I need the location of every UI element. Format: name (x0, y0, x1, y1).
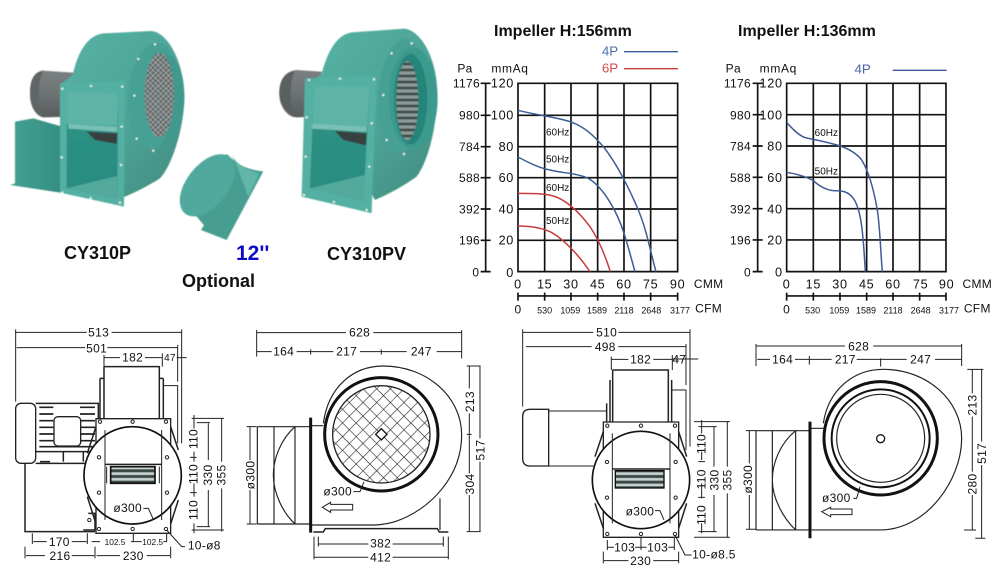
chart: impeller 136mm performance curves: 45 (859, 278, 874, 292)
drawing: CY310P side elevation: 382 (370, 537, 391, 551)
drawing: CY310PV front elevation: 182 (630, 352, 651, 366)
drawing: CY310P side elevation: ø300 (323, 485, 352, 499)
drawing: CY310PV front elevation: 230 (630, 554, 651, 568)
chart: impeller 156mm performance curves: 60Hz (546, 183, 569, 194)
drawing: CY310PV side elevation: ø300 (741, 465, 755, 494)
chart: impeller 156mm performance curves: 588 (459, 171, 480, 185)
chart: impeller 136mm performance curves: 4P (854, 62, 871, 77)
chart: impeller 136mm performance curves: 15 (806, 278, 821, 292)
chart: impeller 136mm performance curves: 1589 (856, 305, 876, 315)
chart: impeller 136mm performance curves: CFM (964, 302, 991, 316)
chart: impeller 156mm performance curves: 90 (670, 278, 685, 292)
drawing: CY310P front elevation: 216 (49, 549, 70, 563)
drawing: CY310P side elevation: 164 (273, 345, 294, 359)
drawing: CY310PV front elevation: 110 (695, 469, 709, 489)
chart: impeller 136mm performance curves: 3177 (939, 305, 959, 315)
chart: impeller 156mm performance curves: 60Hz (546, 127, 569, 138)
chart: impeller 136mm performance curves: 60Hz (815, 128, 838, 139)
chart: impeller 136mm performance curves: Pa (726, 61, 741, 75)
drawing: CY310P front elevation: 355 (214, 464, 228, 485)
chart: impeller 156mm performance curves: 0 (472, 266, 479, 280)
chart: impeller 156mm performance curves: 1059 (560, 305, 580, 315)
drawing: CY310P side elevation: 213 (463, 391, 477, 412)
chart: impeller 156mm performance curves: 15 (537, 278, 552, 292)
chart: impeller 156mm performance curves: 80 (499, 140, 514, 154)
chart: impeller 136mm performance curves: 20 (767, 234, 783, 248)
chart: impeller 156mm performance curves: 530 (537, 305, 552, 315)
chart: impeller 136mm performance curves (724, 61, 992, 317)
chart: impeller 136mm performance curves: 100 (760, 108, 783, 122)
chart: impeller 136mm performance curves: 2648 (911, 305, 931, 315)
chart: impeller 156mm performance curves (453, 44, 723, 317)
chart: impeller 156mm performance curves: 75 (643, 278, 658, 292)
drawing: CY310P side elevation: 412 (370, 551, 391, 565)
chart: impeller 136mm performance curves: 1059 (829, 305, 849, 315)
drawing: CY310P side elevation: ø300 (243, 461, 257, 489)
drawing: CY310PV front elevation: 110 (695, 434, 709, 454)
drawing: CY310P side elevation: 628 (349, 326, 370, 340)
chart: impeller 136mm performance curves: 0 (744, 266, 751, 280)
drawing: CY310P front elevation: 501 (86, 341, 107, 355)
drawing: CY310PV side elevation: 164 (772, 352, 793, 366)
drawing: CY310PV front elevation: 355 (721, 469, 735, 490)
drawing: CY310P front elevation: 170 (49, 535, 70, 549)
chart: impeller 156mm performance curves: 0 (506, 266, 514, 280)
chart: impeller 156mm performance curves: CMM (694, 277, 723, 291)
chart: impeller 156mm performance curves: 120 (491, 77, 514, 91)
chart: impeller 156mm performance curves: Pa (457, 61, 473, 75)
chart: impeller 156mm performance curves: 0 (514, 278, 522, 292)
drawing: CY310PV side elevation: ø300 (822, 491, 851, 505)
chart: impeller 136mm performance curves: 784 (730, 140, 751, 154)
chart: impeller 136mm performance curves: 30 (832, 278, 848, 292)
drawing: CY310P side elevation: 217 (336, 345, 357, 359)
photo: optional 12 inch duct adapter (169, 144, 263, 240)
chart: impeller 136mm performance curves: 0 (775, 266, 783, 280)
chart: impeller 136mm performance curves: 980 (730, 108, 751, 122)
chart: impeller 136mm performance curves: 0 (783, 303, 790, 317)
chart: impeller 156mm performance curves: 1176 (453, 77, 480, 91)
chart: impeller 136mm performance curves: 120 (760, 77, 783, 91)
drawing: CY310PV side elevation (741, 340, 989, 538)
drawing: CY310PV front elevation: 47 (672, 353, 686, 367)
drawing: CY310PV front elevation: 330 (707, 469, 721, 490)
chart: impeller 156mm performance curves: 2118 (614, 305, 634, 315)
chart: impeller 156mm performance curves: 0 (514, 303, 521, 317)
chart: impeller 136mm performance curves: CMM (962, 277, 992, 291)
drawing: CY310PV front elevation: 10-ø8.5 (692, 548, 736, 562)
drawing: CY310P front elevation: 102.5 (105, 537, 126, 547)
drawing: CY310PV side elevation: 628 (848, 340, 869, 354)
chart: impeller 136mm performance curves: 392 (730, 202, 751, 216)
chart: impeller 156mm performance curves: 6P (602, 61, 618, 76)
chart: impeller 156mm performance curves: 4P (602, 44, 618, 59)
photo: CY310PV blower (279, 29, 438, 213)
drawing: CY310PV side elevation: 213 (966, 394, 980, 415)
drawing: CY310PV front elevation: 498 (595, 340, 616, 354)
chart: impeller 156mm performance curves: 980 (459, 108, 480, 122)
label: CY310P: CY310P (64, 243, 131, 263)
drawing: CY310P front elevation: 110 (187, 429, 201, 449)
chart: impeller 136mm performance curves: 60 (767, 171, 783, 185)
chart: impeller 156mm performance curves: 30 (563, 278, 579, 292)
chart: impeller 156mm performance curves: 45 (590, 278, 605, 292)
label: 12 inch size: 12'' (236, 242, 269, 265)
chart: impeller 136mm performance curves: 1176 (724, 77, 751, 91)
chart: impeller 156mm performance curves: 100 (491, 108, 514, 122)
chart: impeller 136mm performance curves: 80 (767, 140, 783, 154)
chart: impeller 156mm performance curves: 40 (499, 202, 514, 216)
drawing: CY310PV side elevation: 517 (975, 443, 989, 464)
chart: impeller 136mm performance curves: 530 (805, 305, 820, 315)
drawing: CY310PV side elevation: 247 (910, 352, 931, 366)
chart: impeller 156mm performance curves: 20 (499, 234, 514, 248)
chart: impeller 156mm performance curves: CFM (695, 302, 722, 316)
heading: impeller 136mm: Impeller H:136mm (738, 23, 876, 40)
chart: impeller 136mm performance curves: 60 (885, 278, 901, 292)
drawing: CY310P side elevation: 304 (463, 473, 477, 494)
drawing: CY310P side elevation (243, 326, 487, 565)
drawing: CY310P front elevation: 110 (187, 464, 201, 484)
drawing: CY310P front elevation: 330 (201, 464, 215, 485)
drawing: CY310P front elevation: 182 (122, 351, 143, 365)
drawing: CY310PV side elevation: 280 (966, 473, 980, 494)
drawing: CY310P front elevation: 110 (187, 500, 201, 520)
chart: impeller 156mm performance curves: 196 (459, 234, 480, 248)
chart: impeller 156mm performance curves: 50Hz (546, 154, 569, 165)
chart: impeller 136mm performance curves: 40 (767, 202, 783, 216)
drawing: CY310PV front elevation: 510 (596, 326, 617, 340)
chart: impeller 156mm performance curves: 60 (499, 171, 514, 185)
drawing: CY310PV front elevation: ø300 (626, 505, 654, 519)
chart: impeller 136mm performance curves: 50Hz (815, 167, 838, 178)
chart: impeller 136mm performance curves: 2118 (883, 305, 903, 315)
chart: impeller 156mm performance curves: 2648 (641, 305, 661, 315)
drawing: CY310P side elevation: 517 (473, 439, 487, 460)
drawing: CY310PV side elevation: 217 (835, 352, 856, 366)
chart: impeller 136mm performance curves: 196 (730, 234, 751, 248)
label: CY310PV: CY310PV (327, 244, 406, 264)
drawing: CY310PV front elevation: 103 (647, 541, 668, 555)
chart: impeller 156mm performance curves: mmAq (491, 61, 529, 75)
drawing: CY310PV front elevation: 110 (695, 505, 709, 525)
chart: impeller 156mm performance curves: 1589 (587, 305, 607, 315)
label: Optional: Optional (182, 271, 255, 291)
chart: impeller 136mm performance curves: mmAq (760, 61, 797, 75)
chart: impeller 156mm performance curves: 3177 (670, 305, 690, 315)
chart: impeller 136mm performance curves: 90 (939, 278, 954, 292)
drawing: CY310P front elevation: 47 (164, 353, 176, 364)
chart: impeller 136mm performance curves: 0 (783, 278, 791, 292)
chart: impeller 156mm performance curves: 392 (459, 202, 480, 216)
drawing: CY310PV front elevation: 103 (614, 541, 635, 555)
chart: impeller 136mm performance curves: 588 (730, 171, 751, 185)
drawing: CY310P front elevation: 513 (88, 326, 109, 340)
chart: impeller 136mm performance curves: 75 (913, 278, 928, 292)
drawing: CY310P front elevation: 10-ø8 (188, 538, 221, 552)
heading: impeller 156mm: Impeller H:156mm (494, 23, 632, 40)
chart: impeller 156mm performance curves: 784 (459, 140, 480, 154)
drawing: CY310P front elevation (15, 326, 228, 563)
chart: impeller 156mm performance curves: 50Hz (546, 216, 569, 227)
drawing: CY310P front elevation: ø300 (113, 501, 142, 515)
chart: impeller 156mm performance curves: 60 (616, 278, 632, 292)
drawing: CY310PV front elevation (523, 326, 736, 568)
photo: CY310P blower (10, 31, 184, 207)
drawing: CY310P side elevation: 247 (411, 345, 432, 359)
drawing: CY310P front elevation: 230 (123, 549, 144, 563)
drawing: CY310P front elevation: 102.5 (142, 537, 163, 547)
